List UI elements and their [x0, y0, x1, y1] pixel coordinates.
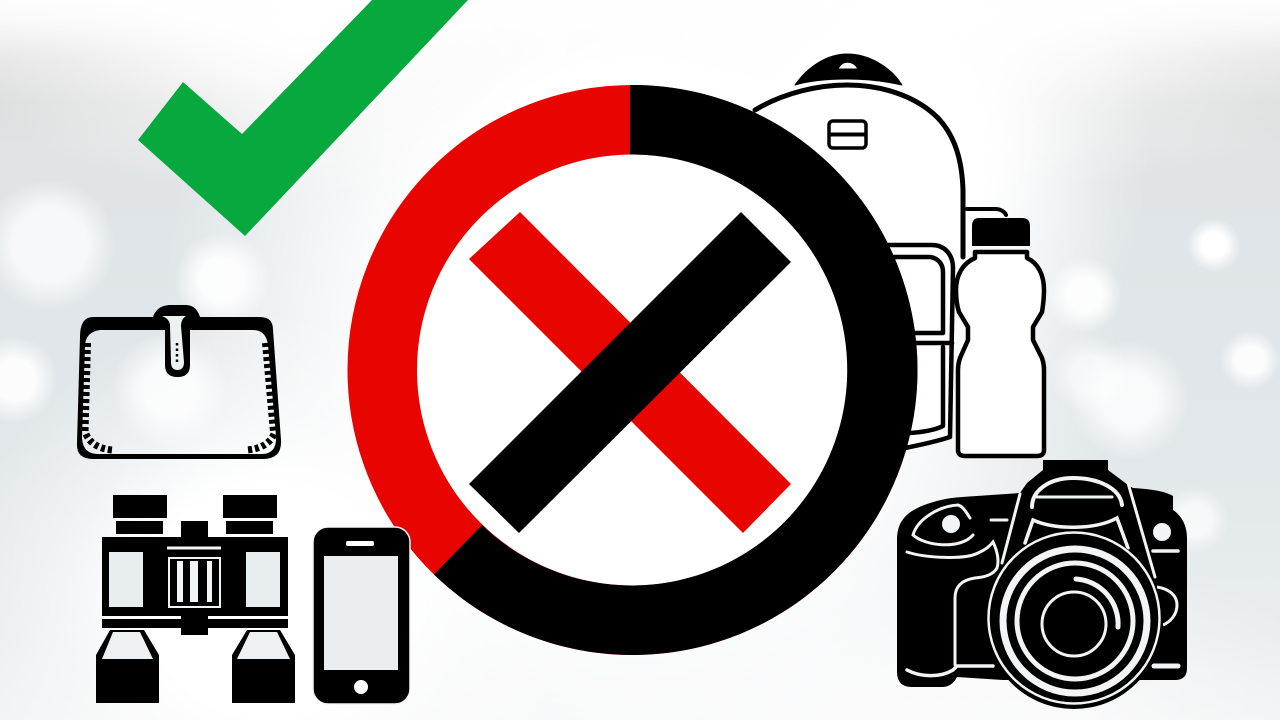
prohibition sign	[382, 85, 917, 655]
phone screen	[324, 556, 398, 670]
red diagonal bar	[469, 212, 791, 533]
backpack side strap	[967, 209, 1006, 215]
backpack buckle	[829, 121, 866, 148]
binocular body	[102, 521, 288, 616]
center wheel	[167, 548, 221, 607]
camera body	[897, 460, 1187, 687]
icon: water bottle	[956, 218, 1044, 456]
icon: binoculars	[96, 495, 295, 703]
bottle cap	[972, 218, 1030, 246]
icon: backpack	[755, 54, 1006, 448]
camera lens	[985, 531, 1163, 709]
backpack body outline	[755, 85, 963, 257]
ring: black half	[434, 85, 917, 655]
icon: SLR camera	[897, 460, 1187, 709]
camera detail lines	[907, 478, 1178, 676]
backpack pocket	[888, 245, 953, 448]
right eyepiece	[223, 495, 277, 534]
black diagonal bar	[469, 212, 791, 533]
bottle body	[956, 252, 1044, 456]
sign white disc	[416, 154, 848, 586]
phone speaker	[346, 541, 374, 546]
icon: green check mark	[138, 0, 468, 236]
right barrel	[232, 630, 295, 703]
wallet body	[77, 317, 281, 459]
camera strap lug	[1157, 587, 1177, 625]
icon: smartphone	[313, 527, 410, 704]
phone button	[354, 680, 368, 694]
wallet clasp	[153, 305, 200, 317]
icon: wallet	[77, 305, 281, 459]
left eyepiece	[113, 495, 167, 534]
backpack handle	[795, 54, 902, 85]
left barrel	[96, 630, 159, 703]
ring: red half	[382, 120, 883, 620]
hinge bar	[102, 614, 288, 635]
